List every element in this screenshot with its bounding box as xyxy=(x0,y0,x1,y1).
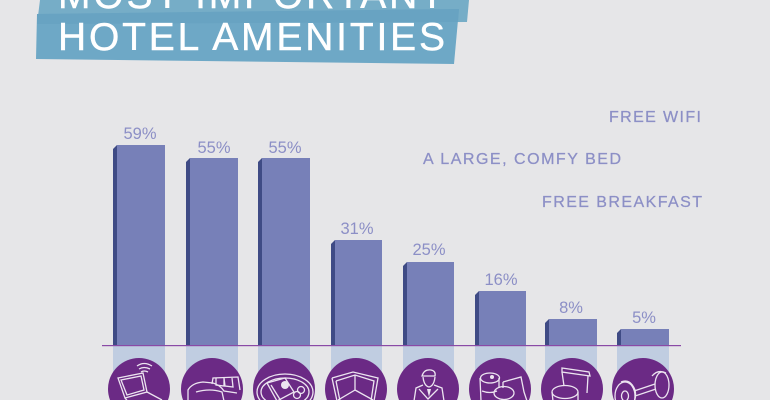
legend labels xyxy=(423,109,702,211)
icon: concierge xyxy=(397,358,459,400)
title text: HOTEL AMENITIES xyxy=(58,16,445,59)
bar: toilet 8% xyxy=(545,299,597,345)
bar: gym 5%: 5% xyxy=(632,309,656,327)
bar: snacks 16% xyxy=(475,271,526,345)
bar: room 31%: 31% xyxy=(340,220,374,238)
bar: free wifi 59% xyxy=(113,125,165,345)
bar: free breakfast 55%: 55% xyxy=(268,139,302,157)
bar shadows xyxy=(113,345,669,375)
legend labels: FREE WIFI xyxy=(609,109,701,126)
title banner xyxy=(36,0,469,64)
bar: free breakfast 55% xyxy=(258,139,310,345)
bar: comfy bed 55%: 55% xyxy=(197,139,231,157)
bar: concierge 25% xyxy=(403,241,454,345)
bar: concierge 25%: 25% xyxy=(412,241,446,259)
icon: snacks xyxy=(469,358,531,400)
bar: snacks 16%: 16% xyxy=(484,271,518,289)
bar: free wifi 59%: 59% xyxy=(123,125,157,143)
legend labels: A LARGE, COMFY BED xyxy=(423,151,621,168)
bar: toilet 8%: 8% xyxy=(559,299,583,317)
bar chart xyxy=(113,125,669,345)
bar: comfy bed 55% xyxy=(186,139,238,345)
icon: laptop with wifi xyxy=(108,358,170,400)
icon: bed xyxy=(181,358,243,400)
bar: room 31% xyxy=(331,220,382,345)
icon: room corner xyxy=(325,358,387,400)
icon: dumbbell xyxy=(612,358,674,400)
bar: gym 5% xyxy=(617,309,669,345)
icon: breakfast plate xyxy=(253,358,315,400)
legend labels: FREE BREAKFAST xyxy=(542,194,702,211)
icon: toilet xyxy=(541,358,603,400)
